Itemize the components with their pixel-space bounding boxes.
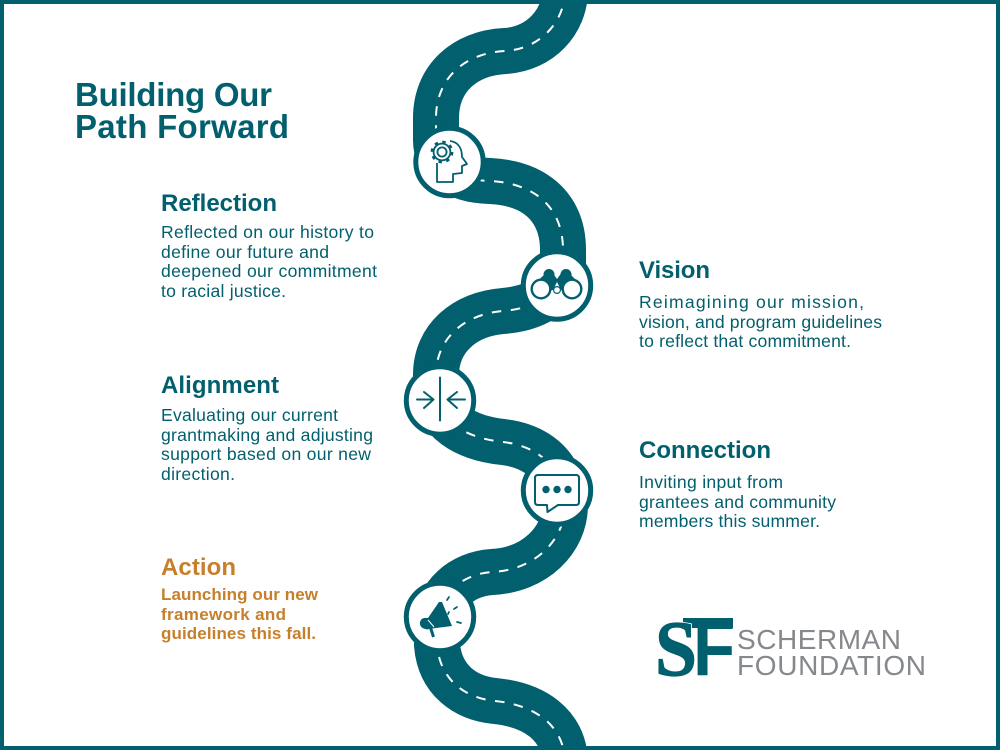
winding road xyxy=(436,0,565,750)
icon: head with gear xyxy=(416,128,483,196)
logo wordmark: FOUNDATION xyxy=(737,650,926,681)
logo: Scherman Foundation xyxy=(655,602,926,692)
title xyxy=(75,76,289,145)
logo mark: SF xyxy=(655,602,735,692)
panel: reflection: Reflection xyxy=(161,190,277,217)
panel: alignment: grantmaking and adjusting xyxy=(161,425,373,445)
panel: action: Action xyxy=(161,554,236,581)
icon: speech bubble xyxy=(523,457,591,524)
panel: vision: to reflect that commitment. xyxy=(639,331,851,351)
logo mark: SF: F xyxy=(693,602,735,692)
icon: converging arrows xyxy=(406,367,474,434)
title: Path Forward xyxy=(75,108,289,145)
panel: reflection xyxy=(161,190,377,301)
panel: connection: Connection xyxy=(639,437,771,464)
panel: vision xyxy=(639,257,882,351)
panel: alignment: direction. xyxy=(161,464,235,484)
panel: reflection: to racial justice. xyxy=(161,281,286,301)
title: Building Our xyxy=(75,76,272,113)
icon: megaphone xyxy=(406,583,474,651)
panel: reflection: Reflected on our history to xyxy=(161,222,374,242)
icon: binoculars xyxy=(523,252,591,319)
panel: vision: vision, and program guidelines xyxy=(639,312,882,332)
panel: action xyxy=(161,554,319,643)
logo mark: SF: S xyxy=(655,605,697,692)
logo mark: SF: S xyxy=(655,605,697,692)
panel: alignment: Alignment xyxy=(161,372,279,399)
panel: connection: members this summer. xyxy=(639,511,820,531)
panel: action: Launching our new xyxy=(161,585,319,604)
panel: reflection: define our future and xyxy=(161,242,329,262)
panel: connection: Inviting input from xyxy=(639,472,783,492)
panel: alignment: Evaluating our current xyxy=(161,405,338,425)
panel: vision: Reimagining our mission, xyxy=(639,292,864,312)
panel: action: guidelines this fall. xyxy=(161,624,316,643)
panel: alignment xyxy=(161,372,373,484)
panel: alignment: support based on our new xyxy=(161,444,371,464)
panel: connection xyxy=(639,437,836,531)
panel: vision: Vision xyxy=(639,257,710,284)
panel: action: framework and xyxy=(161,605,286,624)
panel: reflection: deepened our commitment xyxy=(161,261,377,281)
panel: connection: grantees and community xyxy=(639,492,836,512)
logo wordmark: SCHERMAN xyxy=(737,624,901,655)
logo wordmark xyxy=(737,624,926,681)
